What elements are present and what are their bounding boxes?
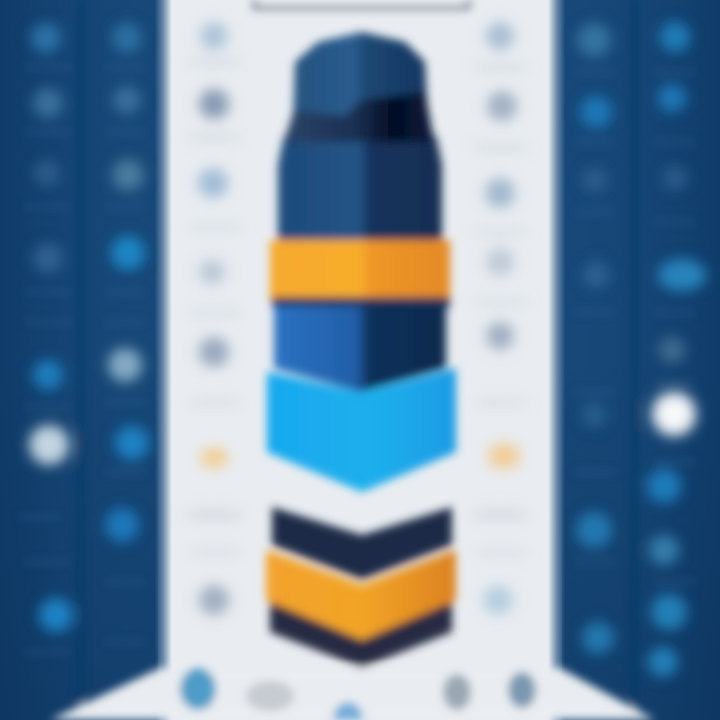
dark chevron bbox=[272, 507, 452, 580]
orange band shadow bbox=[272, 297, 450, 307]
panel: bottom icons bbox=[180, 668, 536, 720]
chart: central layered tower bbox=[266, 32, 456, 668]
panel: left column background bbox=[0, 0, 172, 720]
lower dark chevron bbox=[270, 600, 452, 668]
tower top block bbox=[293, 32, 428, 125]
left column icons bbox=[29, 23, 149, 632]
icon: bottom blue circle left bbox=[180, 668, 216, 710]
left column divider and lines bbox=[20, 0, 145, 720]
icon: bottom blue circle centre bbox=[333, 702, 363, 720]
right column icons bbox=[576, 22, 706, 677]
top header bar bbox=[255, 0, 468, 7]
light blue block bbox=[267, 368, 456, 492]
panel: right column background bbox=[548, 0, 720, 720]
mid blue band bbox=[274, 306, 446, 392]
panel: inner left icon column bbox=[184, 22, 244, 615]
panel: inner right icon column bbox=[470, 22, 530, 615]
bottom text block bbox=[246, 681, 294, 711]
tower neck block bbox=[278, 132, 442, 242]
icon: bottom grey circle bbox=[443, 674, 471, 710]
left column bottom shade bbox=[0, 360, 158, 720]
icon: bottom dark circle bbox=[508, 672, 536, 708]
bottom white floor bbox=[50, 668, 655, 720]
right column bottom shade bbox=[562, 360, 720, 720]
orange chevron bbox=[266, 550, 456, 640]
right column divider and lines bbox=[575, 0, 695, 720]
tower dark band bbox=[284, 92, 434, 142]
orange band bbox=[270, 240, 450, 300]
